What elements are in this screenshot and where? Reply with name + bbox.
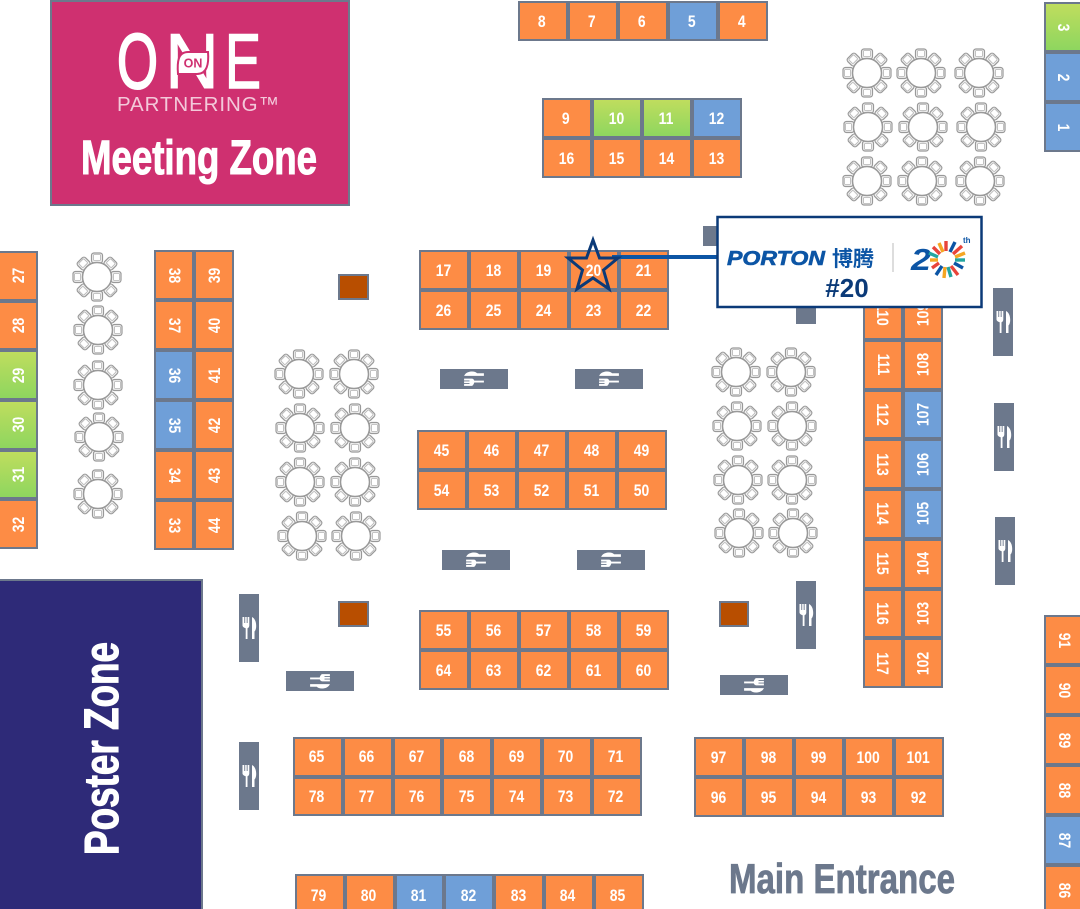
- booth 34: [154, 450, 194, 500]
- booth 89: [1044, 715, 1080, 765]
- booth 55: 55: [435, 620, 451, 640]
- booth 33: 33: [164, 517, 183, 533]
- logo: ONE: N: [165, 17, 219, 105]
- booth 113: 113: [874, 453, 892, 475]
- booth 103: 103: [914, 602, 932, 625]
- booth 55: [419, 610, 469, 650]
- booth 103: [903, 588, 943, 638]
- booth 18: [469, 250, 519, 290]
- booth 59: 59: [635, 620, 651, 640]
- booth 105: 105: [914, 502, 932, 526]
- booth 37: [154, 300, 194, 350]
- booth 51: 51: [583, 480, 599, 500]
- booth 5: [668, 1, 718, 41]
- booth 101: 101: [906, 748, 930, 766]
- booth 100: [844, 737, 894, 777]
- booth 95: [744, 777, 794, 817]
- booth 9: [542, 98, 592, 138]
- booth 36: [154, 350, 194, 400]
- booth 98: [744, 737, 794, 777]
- gray marker lower: [796, 305, 816, 324]
- booth 36: 36: [164, 367, 183, 383]
- booth 96: [694, 777, 744, 817]
- booth 48: [567, 430, 617, 470]
- booth column 33-38: [154, 250, 194, 550]
- booth 16: 16: [558, 148, 574, 168]
- booth 68: 68: [459, 747, 474, 766]
- booth 74: 74: [508, 787, 524, 806]
- logo: PARTNERING: PARTNERING™: [117, 93, 279, 116]
- booth 79: 79: [311, 886, 327, 904]
- booth 38: [154, 250, 194, 300]
- booth block 9-16: [542, 98, 742, 178]
- booth 46: 46: [483, 440, 499, 460]
- booth 4: 4: [738, 12, 746, 30]
- booth 29: 29: [8, 367, 27, 383]
- booth 93: [844, 777, 894, 817]
- booth 96: 96: [710, 788, 726, 806]
- column marker 1: [339, 275, 368, 299]
- booth 32: 32: [8, 517, 27, 532]
- booth 100: 100: [856, 748, 880, 766]
- booth 68: [442, 737, 492, 777]
- booth 15: 15: [608, 148, 624, 168]
- booth 82: [444, 874, 494, 909]
- booth 110: 110: [874, 304, 892, 326]
- booth 86: 86: [1054, 882, 1073, 898]
- booth 43: [194, 450, 234, 500]
- booth 70: [542, 737, 592, 777]
- icon: star on booth 20: [568, 240, 618, 289]
- tables: centre left: [275, 350, 380, 560]
- booth 72: 72: [608, 787, 623, 806]
- booth 47: [517, 430, 567, 470]
- booth 79: [295, 874, 345, 909]
- booth 59: [619, 610, 669, 650]
- booth 77: 77: [359, 787, 374, 806]
- icon: catering sign 3: [442, 550, 510, 570]
- booth 108: 108: [914, 353, 932, 376]
- booth 14: 14: [658, 148, 674, 168]
- booth 39: [194, 250, 234, 300]
- booth 27: 27: [8, 268, 27, 284]
- booth 111: 111: [874, 354, 892, 375]
- booth 97: 97: [710, 748, 726, 766]
- booth 112: [863, 390, 903, 439]
- booth 84: 84: [560, 886, 576, 904]
- booth 81: 81: [411, 886, 426, 904]
- logo: ONE: O: [117, 17, 158, 105]
- booth 60: 60: [635, 660, 651, 680]
- icon: catering sign 7: [239, 594, 259, 662]
- booth 82: 82: [461, 886, 476, 904]
- booth 22: [619, 290, 669, 330]
- booth 1: 1: [1054, 123, 1074, 131]
- booth 8: [518, 1, 568, 41]
- booth 16: [542, 138, 592, 178]
- booth 48: 48: [583, 440, 599, 460]
- booth 90: 90: [1054, 682, 1073, 698]
- booth 101: [894, 737, 944, 777]
- booth 57: [519, 610, 569, 650]
- booth 2: 2: [1054, 73, 1074, 81]
- booth 58: [569, 610, 619, 650]
- booth 46: [467, 430, 517, 470]
- icon: catering sign 10: [993, 288, 1013, 356]
- booth column 27-32: [0, 251, 38, 549]
- booth column 86-91: [1044, 615, 1080, 909]
- booth 27: [0, 251, 38, 301]
- booth 54: [417, 470, 467, 510]
- booth 107: 107: [914, 403, 932, 426]
- booth 28: [0, 301, 38, 350]
- booth 11: 11: [659, 108, 673, 128]
- booth 105: [903, 489, 943, 539]
- logo: 20th anniversary: [910, 236, 971, 278]
- booth 18: 18: [485, 260, 501, 280]
- divider: [892, 243, 894, 272]
- booth 25: [469, 290, 519, 330]
- booth 71: 71: [608, 747, 623, 766]
- logo: ONE: [117, 17, 261, 105]
- booth 117: [863, 638, 903, 688]
- booth 9: 9: [562, 108, 570, 128]
- booth 85: 85: [610, 886, 625, 904]
- booth 65: 65: [309, 747, 325, 766]
- booth 5: 5: [688, 12, 696, 30]
- booth 50: [617, 470, 667, 510]
- booth 106: 106: [914, 452, 932, 476]
- booth 63: 63: [485, 660, 501, 680]
- booth 86: [1044, 865, 1080, 909]
- booth 4: [718, 1, 768, 41]
- tables: top right: [843, 49, 1005, 205]
- booth 80: 80: [361, 886, 376, 904]
- booth 44: 44: [204, 517, 223, 533]
- booth 38: 38: [164, 267, 183, 283]
- tables: centre right: [712, 348, 817, 557]
- booth 99: 99: [810, 748, 826, 766]
- booth 30: 30: [8, 417, 27, 433]
- booth 98: 98: [760, 748, 776, 766]
- booth 23: 23: [585, 300, 601, 320]
- booth 15: [592, 138, 642, 178]
- booth 74: [492, 777, 542, 816]
- booth 113: [863, 439, 903, 489]
- booth 111: [863, 340, 903, 390]
- label: Main Entrance: Main Entrance: [729, 855, 955, 902]
- booth 22: 22: [635, 300, 651, 320]
- booth label #20: #20: [825, 273, 869, 303]
- booth 115: [863, 539, 903, 588]
- booth 20: [569, 250, 619, 290]
- booth 28: 28: [8, 318, 27, 333]
- booth 78: [293, 777, 343, 816]
- booth block 4-8: [518, 1, 768, 41]
- booth 97: [694, 737, 744, 777]
- booth 92: [894, 777, 944, 817]
- booth 76: [393, 777, 442, 816]
- booth 29: [0, 350, 38, 400]
- booth 54: 54: [433, 480, 449, 500]
- gray marker upper: [703, 226, 719, 246]
- booth 37: 37: [164, 317, 183, 333]
- booth 21: 21: [635, 260, 651, 280]
- icon: catering sign 5: [286, 671, 354, 691]
- booth 45: [417, 430, 467, 470]
- booth 40: 40: [204, 317, 223, 333]
- booth 73: 73: [558, 787, 574, 806]
- booth 10: 10: [608, 108, 624, 128]
- booth 85: [594, 874, 644, 909]
- booth 49: 49: [633, 440, 649, 460]
- logo: ON leaf: ON: [184, 56, 202, 70]
- booth 88: [1044, 765, 1080, 815]
- booth block 17-26: [419, 250, 669, 330]
- booth 42: [194, 400, 234, 450]
- booth 99: [794, 737, 844, 777]
- booth 91: [1044, 615, 1080, 665]
- booth 76: 76: [409, 787, 424, 806]
- booth 92: 92: [910, 788, 926, 806]
- booth 19: [519, 250, 569, 290]
- booth 1: [1044, 102, 1080, 152]
- booth 58: 58: [585, 620, 601, 640]
- booth 33: [154, 500, 194, 550]
- booth 3: [1044, 2, 1080, 52]
- booth 67: [393, 737, 442, 777]
- booth 93: 93: [860, 788, 876, 806]
- booth 32: [0, 499, 38, 549]
- booth block 65-78: [293, 737, 642, 816]
- connector line to booth 20: [612, 255, 718, 259]
- booth 2: [1044, 52, 1080, 102]
- logo: ON leaf: [178, 52, 208, 74]
- column marker 3: [720, 602, 748, 626]
- booth 61: 61: [585, 660, 601, 680]
- booth 64: [419, 650, 469, 690]
- booth 60: [619, 650, 669, 690]
- booth 75: 75: [459, 787, 474, 806]
- booth 73: [542, 777, 592, 816]
- booth 41: [194, 350, 234, 400]
- booth 40: [194, 300, 234, 350]
- booth 69: 69: [508, 747, 524, 766]
- booth 56: 56: [485, 620, 501, 640]
- booth block 92-101: [694, 737, 944, 817]
- booth 45: 45: [433, 440, 449, 460]
- booth 19: 19: [535, 260, 551, 280]
- icon: catering sign 11: [994, 403, 1014, 471]
- booth 109: 109: [914, 303, 932, 327]
- booth 43: 43: [204, 467, 223, 483]
- booth 90: [1044, 665, 1080, 715]
- column marker 2: [339, 602, 368, 626]
- icon: catering sign 2: [575, 369, 643, 389]
- tables: left column: [73, 253, 123, 518]
- booth 89: 89: [1054, 732, 1073, 748]
- booth 21: [619, 250, 669, 290]
- panel: Meeting Zone: [51, 1, 349, 205]
- booth 78: 78: [309, 787, 325, 806]
- booth 6: [618, 1, 668, 41]
- booth 56: [469, 610, 519, 650]
- booth 24: [519, 290, 569, 330]
- icon: catering sign 4: [577, 550, 645, 570]
- booth 106: [903, 439, 943, 489]
- booth 24: 24: [535, 300, 551, 320]
- booth 10: [592, 98, 642, 138]
- booth 62: [519, 650, 569, 690]
- booth 63: [469, 650, 519, 690]
- booth 3: 3: [1054, 23, 1074, 31]
- booth 70: 70: [558, 747, 574, 766]
- logo: 20th anniversary: 2: [910, 242, 931, 277]
- booth 80: [345, 874, 395, 909]
- booth 72: [592, 777, 642, 816]
- booth 102: 102: [914, 651, 932, 675]
- booth 116: [863, 588, 903, 638]
- booth 41: 41: [204, 367, 223, 383]
- booth 52: 52: [533, 480, 549, 500]
- logo: ONE: E: [225, 17, 261, 105]
- booth 35: [154, 400, 194, 450]
- logo: 20th anniversary: th: [963, 236, 971, 245]
- booth 107: [903, 390, 943, 439]
- booth 115: 115: [874, 552, 892, 575]
- booth 51: [567, 470, 617, 510]
- booth 20: 20: [585, 260, 601, 280]
- booth 26: [419, 290, 469, 330]
- booth block 45-54: [417, 430, 667, 510]
- booth 95: 95: [760, 788, 776, 806]
- booth 53: 53: [483, 480, 499, 500]
- booth 67: 67: [409, 747, 424, 766]
- icon: catering sign 8: [239, 742, 259, 810]
- booth 94: [794, 777, 844, 817]
- booth 7: [568, 1, 618, 41]
- booth block 55-64: [419, 610, 669, 690]
- booth 12: [692, 98, 742, 138]
- booth 84: [544, 874, 594, 909]
- icon: catering sign 1: [440, 369, 508, 389]
- booth 12: 12: [708, 108, 724, 128]
- logo: Porton wordmark: PORTON: [727, 248, 826, 270]
- booth 66: [343, 737, 393, 777]
- booth 31: 31: [8, 467, 27, 482]
- booth 83: 83: [510, 886, 526, 904]
- booth 110: [863, 290, 903, 340]
- booth 65: [293, 737, 343, 777]
- booth 44: [194, 500, 234, 550]
- booth 35: 35: [164, 417, 183, 433]
- booth 112: 112: [874, 403, 892, 426]
- booth 11: [642, 98, 692, 138]
- booth 23: [569, 290, 619, 330]
- booth 13: 13: [708, 148, 724, 168]
- booth 6: 6: [638, 12, 646, 30]
- booth 17: [419, 250, 469, 290]
- booth 52: [517, 470, 567, 510]
- booth 49: [617, 430, 667, 470]
- booth 81: [395, 874, 444, 909]
- booth 102: [903, 638, 943, 688]
- booth 39: 39: [204, 267, 223, 283]
- booth 91: 91: [1054, 632, 1073, 648]
- booth 62: 62: [535, 660, 551, 680]
- booth 61: [569, 650, 619, 690]
- booth 34: 34: [164, 467, 183, 483]
- callout: Porton booth 20: [718, 217, 982, 307]
- booth column 102-109: [903, 303, 943, 688]
- booth 42: 42: [204, 417, 223, 433]
- booth 8: 8: [538, 12, 546, 30]
- booth 71: [592, 737, 642, 777]
- booth 109: [903, 290, 943, 340]
- booth 104: [903, 539, 943, 588]
- booth 7: 7: [588, 12, 596, 30]
- booth 77: [343, 777, 393, 816]
- booth 47: 47: [533, 440, 549, 460]
- booth 31: [0, 450, 38, 499]
- booth 114: 114: [874, 503, 892, 525]
- heading: Poster Zone: Poster Zone: [76, 642, 129, 855]
- booth 26: 26: [435, 300, 451, 320]
- logo: Porton Chinese name: 博腾: [832, 248, 874, 271]
- booth 57: 57: [535, 620, 551, 640]
- booth 116: 116: [874, 602, 892, 625]
- booth 13: [692, 138, 742, 178]
- booth 117: 117: [874, 652, 892, 674]
- booth 94: 94: [810, 788, 826, 806]
- booth column 39-44: [194, 250, 234, 550]
- booth 25: 25: [485, 300, 501, 320]
- booth 114: [863, 489, 903, 539]
- booth 14: [642, 138, 692, 178]
- icon: catering sign 9: [796, 581, 816, 649]
- booth 50: 50: [633, 480, 649, 500]
- heading: Meeting Zone: Meeting Zone: [81, 132, 317, 185]
- panel: Poster Zone: [0, 580, 202, 909]
- icon: catering sign 12: [995, 517, 1015, 585]
- booth column 110-117: [863, 304, 903, 688]
- booth row 79-85: [295, 874, 644, 909]
- booth 108: [903, 340, 943, 390]
- booth 30: [0, 400, 38, 450]
- icon: catering sign 6: [720, 675, 788, 695]
- booth 88: 88: [1054, 782, 1073, 798]
- booth 87: [1044, 815, 1080, 865]
- booth column 1-3: [1044, 2, 1080, 152]
- booth 66: 66: [359, 747, 374, 766]
- booth 53: [467, 470, 517, 510]
- booth 87: 87: [1054, 832, 1073, 848]
- booth 104: 104: [914, 552, 932, 575]
- booth 64: 64: [435, 660, 451, 680]
- booth 69: [492, 737, 542, 777]
- booth 83: [494, 874, 544, 909]
- booth 75: [442, 777, 492, 816]
- booth 17: 17: [435, 260, 451, 280]
